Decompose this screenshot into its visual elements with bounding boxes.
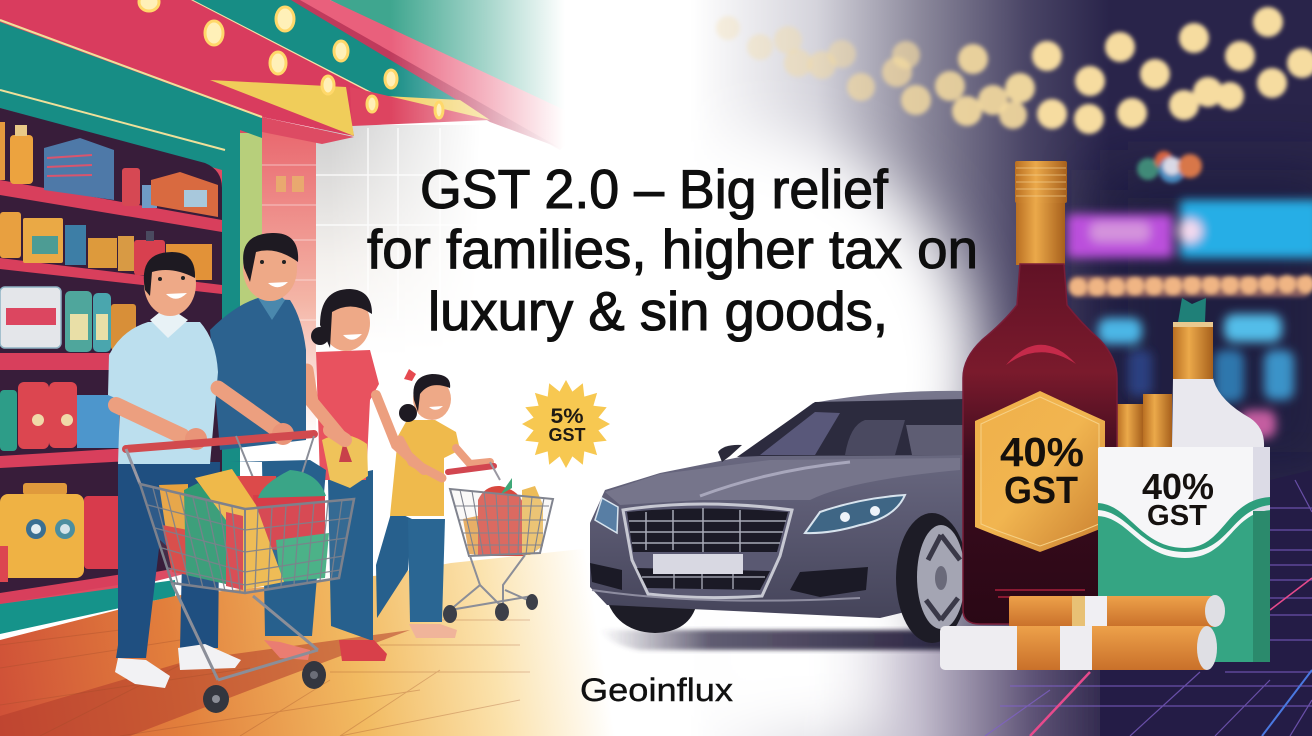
car front wheel [608, 603, 697, 633]
badge: 5% GST: GST [548, 425, 586, 445]
car body [590, 391, 965, 618]
person: man in light blue polo [108, 252, 345, 688]
cigarette pack: GST [1147, 500, 1207, 532]
badge: 5% GST: 5% [550, 405, 584, 428]
floor shadow [0, 630, 410, 736]
background: dark night scene [505, 0, 1312, 736]
car shadow [600, 630, 965, 650]
title: GST 2.0 – Big relief [420, 158, 889, 220]
person: girl [376, 369, 490, 638]
storefront roof and wall [0, 0, 590, 440]
car grille [623, 504, 792, 598]
car hood highlights [605, 458, 960, 505]
bead lights [1068, 275, 1312, 297]
badge: 5% GST [522, 380, 610, 468]
title [367, 158, 978, 342]
car plate [653, 554, 743, 574]
car windshield [737, 399, 965, 457]
teal shelf base [0, 580, 175, 634]
cigarettes behind pack [1117, 394, 1172, 447]
pink roof beam [290, 0, 590, 150]
storefront lintel [198, 2, 354, 144]
tile wall [315, 125, 454, 312]
shelves [0, 180, 222, 604]
person: woman [307, 289, 424, 661]
car [590, 391, 968, 650]
car rear wheel [896, 513, 968, 643]
wine bottle [963, 161, 1117, 624]
bottle label [975, 391, 1105, 552]
storefront floor [0, 545, 620, 736]
bokeh cluster [1137, 151, 1202, 183]
cigarette pack [1098, 447, 1270, 662]
car vents [790, 567, 868, 597]
large trolley [126, 434, 354, 713]
small trolley [443, 462, 553, 623]
car headlights [805, 495, 905, 533]
bottle label: GST [1004, 470, 1078, 512]
shelf products [0, 122, 218, 582]
bottle label: 40% [1000, 429, 1084, 475]
teal roof band [191, 0, 490, 120]
title: for families, higher tax on [367, 218, 978, 280]
neon signs [1067, 200, 1312, 438]
upper green roof [330, 0, 590, 130]
string bulbs [139, 0, 443, 118]
cigarette pack: 40% [1142, 466, 1214, 507]
yellow roof panel [210, 80, 354, 136]
cigarette: upper [1009, 595, 1225, 627]
reflective floor [800, 645, 1312, 736]
pink wall [262, 130, 316, 440]
white bottle [1172, 298, 1264, 447]
title: luxury & sin goods, [428, 280, 888, 342]
crimson roof [0, 0, 366, 136]
frame [0, 20, 262, 620]
dark interior [0, 108, 222, 600]
bokeh string lights [716, 7, 1312, 134]
store interior [0, 20, 262, 634]
person: man in navy polo [210, 233, 326, 660]
brand: Geoinflux: Geoinflux [580, 672, 733, 708]
cigarette: lower [940, 626, 1217, 670]
